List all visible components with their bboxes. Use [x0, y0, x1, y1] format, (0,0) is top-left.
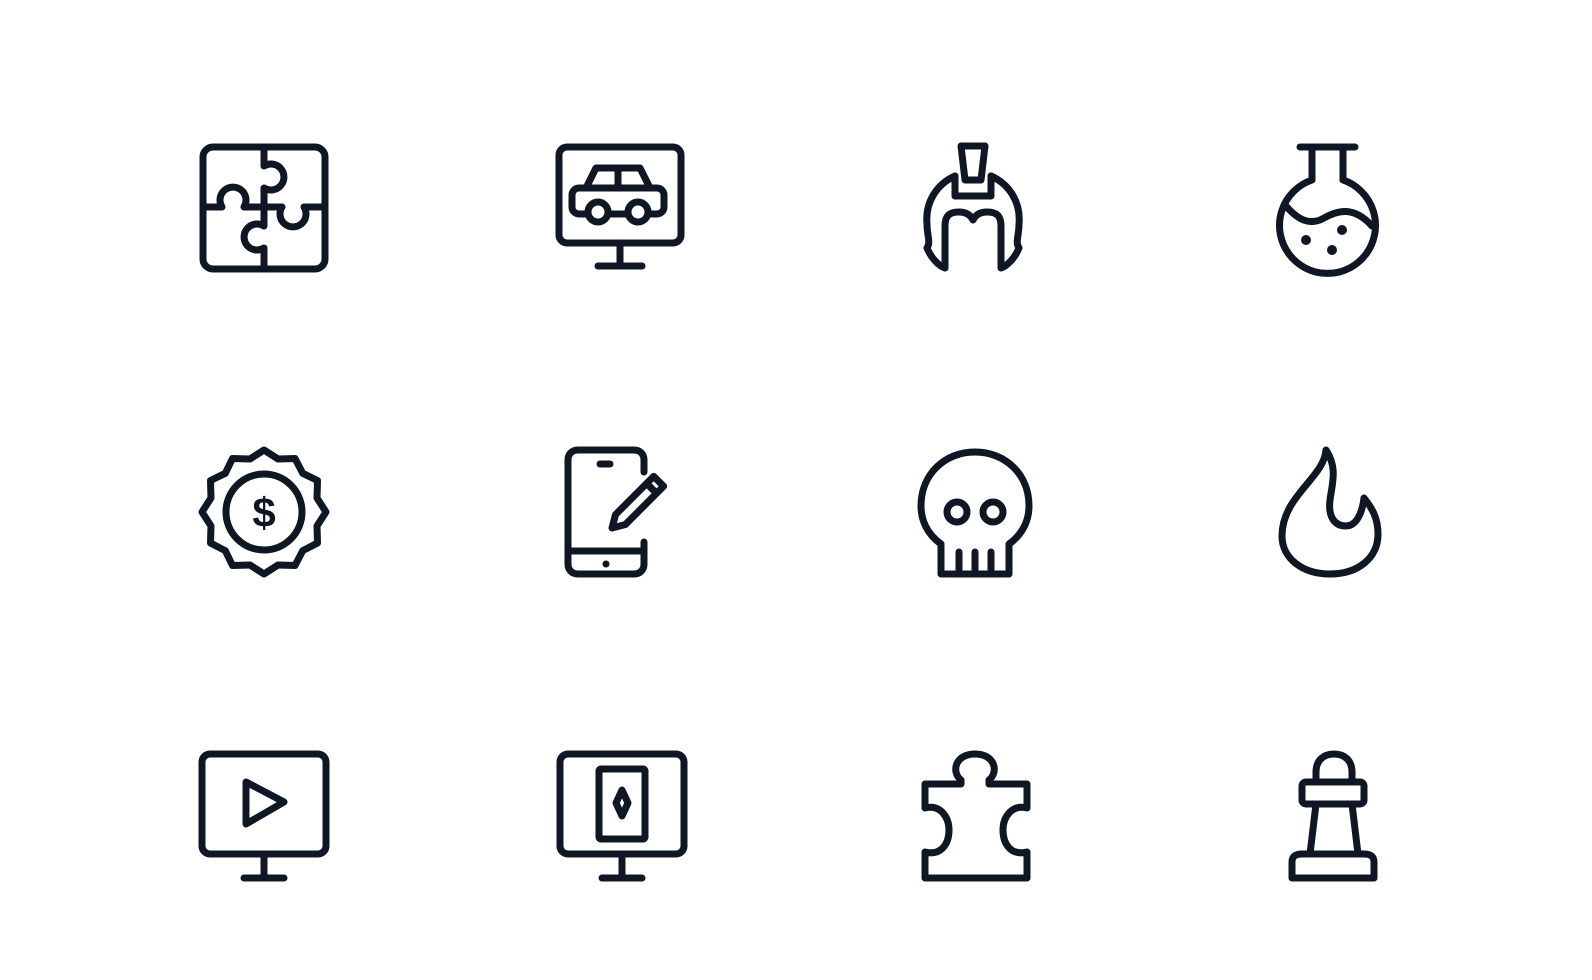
icon: chemistry flask	[1280, 147, 1376, 273]
icon: puzzle square	[203, 147, 325, 269]
icon: flame	[1282, 450, 1378, 574]
icon: monitor with car	[559, 147, 681, 266]
icon: dollar badge: $	[252, 489, 276, 536]
icon: skull	[921, 452, 1029, 574]
icon: monitor with play	[202, 754, 326, 878]
icon: monitor with playing card	[560, 754, 684, 878]
icon: phone with pencil	[568, 450, 664, 574]
icon: chess pawn	[1292, 754, 1374, 878]
icon: dollar badge	[202, 450, 326, 574]
icon: puzzle piece	[925, 754, 1027, 878]
icon: spartan helmet	[927, 146, 1019, 268]
